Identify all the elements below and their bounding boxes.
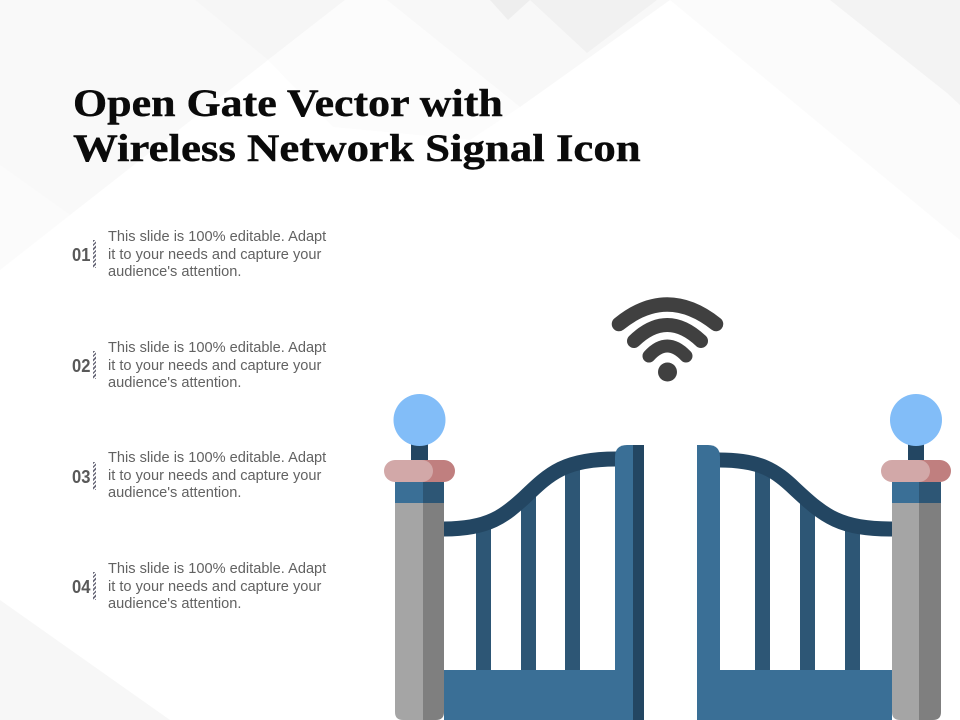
item 04 bbox=[72, 561, 326, 612]
item 01: This slide is 100% editable. Adapt bbox=[108, 229, 326, 245]
item 01: it to your needs and capture your bbox=[108, 246, 321, 262]
item 02: it to your needs and capture your bbox=[108, 358, 321, 374]
item 04: 04 bbox=[72, 577, 90, 597]
title: Open Gate Vector with bbox=[73, 82, 503, 125]
item 01: audience's attention. bbox=[108, 264, 241, 280]
item 02: 02 bbox=[72, 356, 90, 376]
item 04: audience's attention. bbox=[108, 596, 241, 612]
title: Wireless Network Signal Icon bbox=[73, 127, 641, 170]
item 03: This slide is 100% editable. Adapt bbox=[108, 450, 326, 466]
item 02 bbox=[72, 340, 326, 391]
right gate leaf bbox=[697, 445, 893, 720]
item 01 bbox=[72, 229, 326, 280]
icon: wifi signal bbox=[619, 304, 716, 382]
item 02: audience's attention. bbox=[108, 375, 241, 391]
item 03: audience's attention. bbox=[108, 485, 241, 501]
item 03 bbox=[72, 450, 326, 501]
right pillar bbox=[881, 394, 951, 720]
item 03: it to your needs and capture your bbox=[108, 468, 321, 484]
left pillar bbox=[384, 394, 455, 720]
item 01: 01 bbox=[72, 245, 90, 265]
item 04: This slide is 100% editable. Adapt bbox=[108, 561, 326, 577]
item 03: 03 bbox=[72, 467, 90, 487]
left gate leaf bbox=[444, 445, 644, 720]
item 04: it to your needs and capture your bbox=[108, 578, 321, 594]
item 02: This slide is 100% editable. Adapt bbox=[108, 340, 326, 356]
title bbox=[73, 82, 641, 170]
